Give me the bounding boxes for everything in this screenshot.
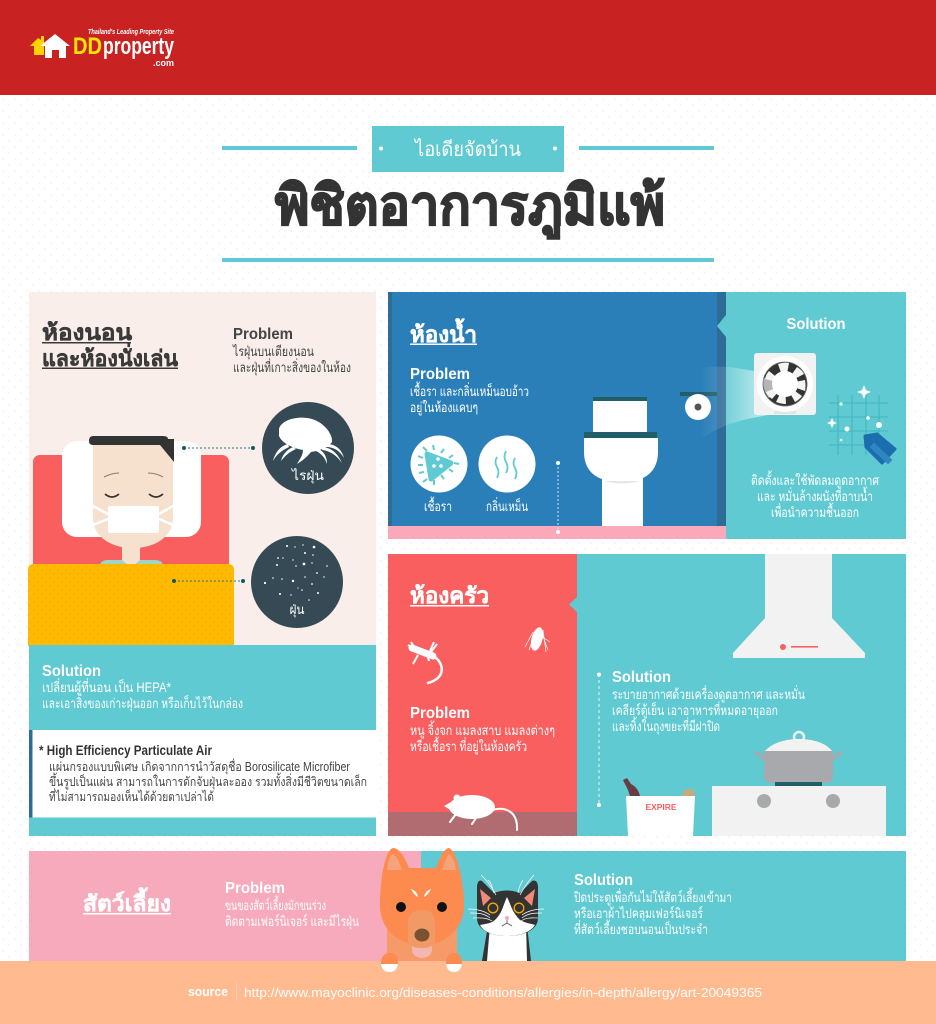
title block: [222, 126, 714, 262]
panel: pets solution: Solution: [574, 872, 633, 889]
panel: bedroom solution: [29, 645, 376, 836]
footnote: HEPA definition: แผ่นกรองแบบพิเศษ เกิดจากการนำวัสดุชื่อ Borosilicate Microfiber: [49, 758, 350, 775]
logo: DDproperty: Thailand's Leading Property Site: [88, 27, 174, 36]
illustration: toilet: [584, 397, 658, 526]
panel: pets solution: [421, 851, 906, 961]
solution text: bathroom: ติดตั้งและใช้พัดลมดูดอากาศ: [751, 470, 879, 489]
icon: bad smell: กลิ่นเหม็น: [486, 497, 528, 514]
icon: gecko: [408, 642, 442, 683]
heading: bedroom: และห้องนั่งเล่น: [42, 342, 178, 371]
illustration: sleeping person: [28, 436, 234, 646]
footer band: http://www.mayoclinic.org/diseases-conditions/allergies/in-depth/allergy/art-20049365: [244, 985, 762, 1000]
panel: pets solution: ที่สัตว์เลี้ยงชอบนอนเป็นประจำ: [574, 919, 708, 937]
problem text: pets: ขนของสัตว์เลี้ยงมักขนร่วง: [225, 895, 326, 913]
solution text: kitchen: Solution: [612, 669, 671, 686]
heading: bedroom: ห้องนอน: [42, 320, 132, 345]
subtitle tag: [372, 126, 564, 172]
solution text: bathroom: เพื่อนำความชื้นออก: [771, 502, 859, 520]
panel: bedroom solution: และเอาสิ่งของเก่าะฝุ่นออก หรือเก็บไว้ในกล่อง: [42, 694, 243, 712]
problem text: kitchen: หนู จิ้งจก แมลงสาบ แมลงต่างๆ: [410, 720, 555, 739]
panel: bedroom and living room: [28, 292, 376, 646]
illustration: cat: [468, 875, 544, 961]
panel: pets problem: [29, 851, 421, 961]
problem text: bedroom: และฝุ่นที่เกาะสิ่งของในห้อง: [233, 358, 351, 376]
solution text: bathroom: และ หมั่นล้างผนังที่อาบน้ำ: [757, 486, 873, 504]
subtitle tag: ไอเดียจัดบ้าน: [413, 138, 521, 161]
panel: kitchen solution: [569, 554, 906, 836]
problem text: bathroom: เชื้อรา และกลิ่นเหม็นอบอ้าว: [410, 381, 529, 399]
footer band: [0, 961, 936, 1024]
problem text: kitchen: [410, 705, 555, 755]
logo: DDproperty: property: [103, 33, 174, 60]
problem text: pets: Problem: [225, 880, 285, 897]
icon: mold: [410, 436, 468, 514]
problem text: bathroom: [410, 366, 529, 416]
illustration: stove: [712, 786, 886, 836]
problem text: pets: [225, 880, 359, 930]
illustration: cooking pot: [755, 732, 842, 786]
icon: mold: เชื้อรา: [424, 496, 452, 514]
panel: bedroom solution: Solution: [42, 663, 101, 680]
solution text: kitchen: และทิ้งในถุงขยะที่มีฝาปิด: [612, 716, 720, 735]
logo: DDproperty: DD: [73, 33, 102, 60]
problem text: bathroom: Problem: [410, 366, 470, 383]
heading: bathroom: ห้องน้ำ: [410, 318, 477, 347]
solution text: kitchen: [612, 669, 805, 735]
footer band: source: [188, 985, 228, 999]
icon: bad smell: [478, 436, 536, 514]
icon: dust particles: ฝุ่น: [290, 602, 305, 618]
problem text: kitchen: หรือเชื้อรา ที่อยู่ในห้องครัว: [410, 736, 527, 755]
illustration: range hood: [733, 554, 865, 658]
header band: [0, 0, 936, 95]
illustration: dog: [380, 848, 464, 972]
callout line: dust: [172, 579, 245, 583]
solution text: kitchen: ระบายอากาศด้วยเครื่องดูดอากาศ และหมั่น: [612, 685, 805, 703]
panel: bathroom solution: Solution: [786, 316, 846, 333]
panel: bedroom solution: เปลี่ยนผู้ที่นอน เป็น HEPA*: [42, 678, 172, 696]
illustration: toilet paper: [680, 392, 717, 420]
problem text: bedroom: Problem: [233, 326, 293, 343]
icon: rat: [444, 794, 517, 830]
icon: dust mite: [262, 402, 354, 494]
solution text: kitchen: เคลียร์ตู้เย็น เอาอาหารที่หมดอายุออก: [612, 701, 778, 719]
heading: pets: สัตว์เลี้ยง: [83, 887, 171, 916]
panel: kitchen problem: [388, 554, 577, 836]
callout line: dust mite: [182, 446, 255, 450]
panel: pets solution: หรือเอาผ้าไปคลุมเฟอร์นิเจอร์: [574, 905, 703, 922]
footnote: HEPA definition: [29, 730, 376, 818]
panel: pets solution: ปิดประตูเพื่อกันไม่ให้สัตว์เลี้ยงเข้ามา: [573, 887, 732, 906]
heading: kitchen: ห้องครัว: [410, 583, 489, 608]
heading: bedroom: [42, 320, 178, 371]
logo: DDproperty: .com: [153, 58, 174, 69]
airflow beam: [700, 367, 768, 440]
problem text: pets: ติดตามเฟอร์นิเจอร์ และมีไรฝุ่น: [225, 913, 359, 930]
problem text: bedroom: ไรฝุ่นบนเตียงนอน: [232, 344, 314, 360]
icon: dust mite: ไรฝุ่น: [291, 468, 324, 484]
panel: bathroom problem: [388, 292, 726, 539]
illustration: trash bin: [623, 778, 695, 836]
icon: ventilation fan: [754, 353, 816, 415]
main title: พิชิตอาการภูมิแพ้: [275, 176, 665, 239]
icon: cockroach: [525, 626, 550, 652]
logo: DDproperty: [30, 27, 174, 69]
footnote: HEPA definition: * High Efficiency Particulate Air: [39, 743, 213, 758]
dotted connector: [597, 672, 601, 807]
footnote: HEPA definition: ขึ้นรูปเป็นแผ่น สามารถในการดักจับฝุ่นละออง รวมทั้งสิ่งมีชีวิตขนาดเล็ก: [49, 772, 367, 790]
problem text: bedroom: [232, 326, 351, 376]
footnote: HEPA definition: ที่ไม่สามารถมองเห็นได้ด้วยตาเปล่าได้: [49, 788, 214, 804]
solution text: bathroom: [751, 470, 879, 520]
icon: dust particles: [251, 536, 343, 628]
icon: clean tiles and sponge: [827, 385, 895, 463]
dotted connector: [556, 461, 560, 534]
panel: bathroom solution: [700, 292, 906, 539]
illustration: trash bin: EXPIRE: [646, 803, 677, 812]
problem text: bathroom: อยู่ในห้องแคบๆ: [410, 399, 478, 416]
problem text: kitchen: Problem: [410, 705, 470, 722]
